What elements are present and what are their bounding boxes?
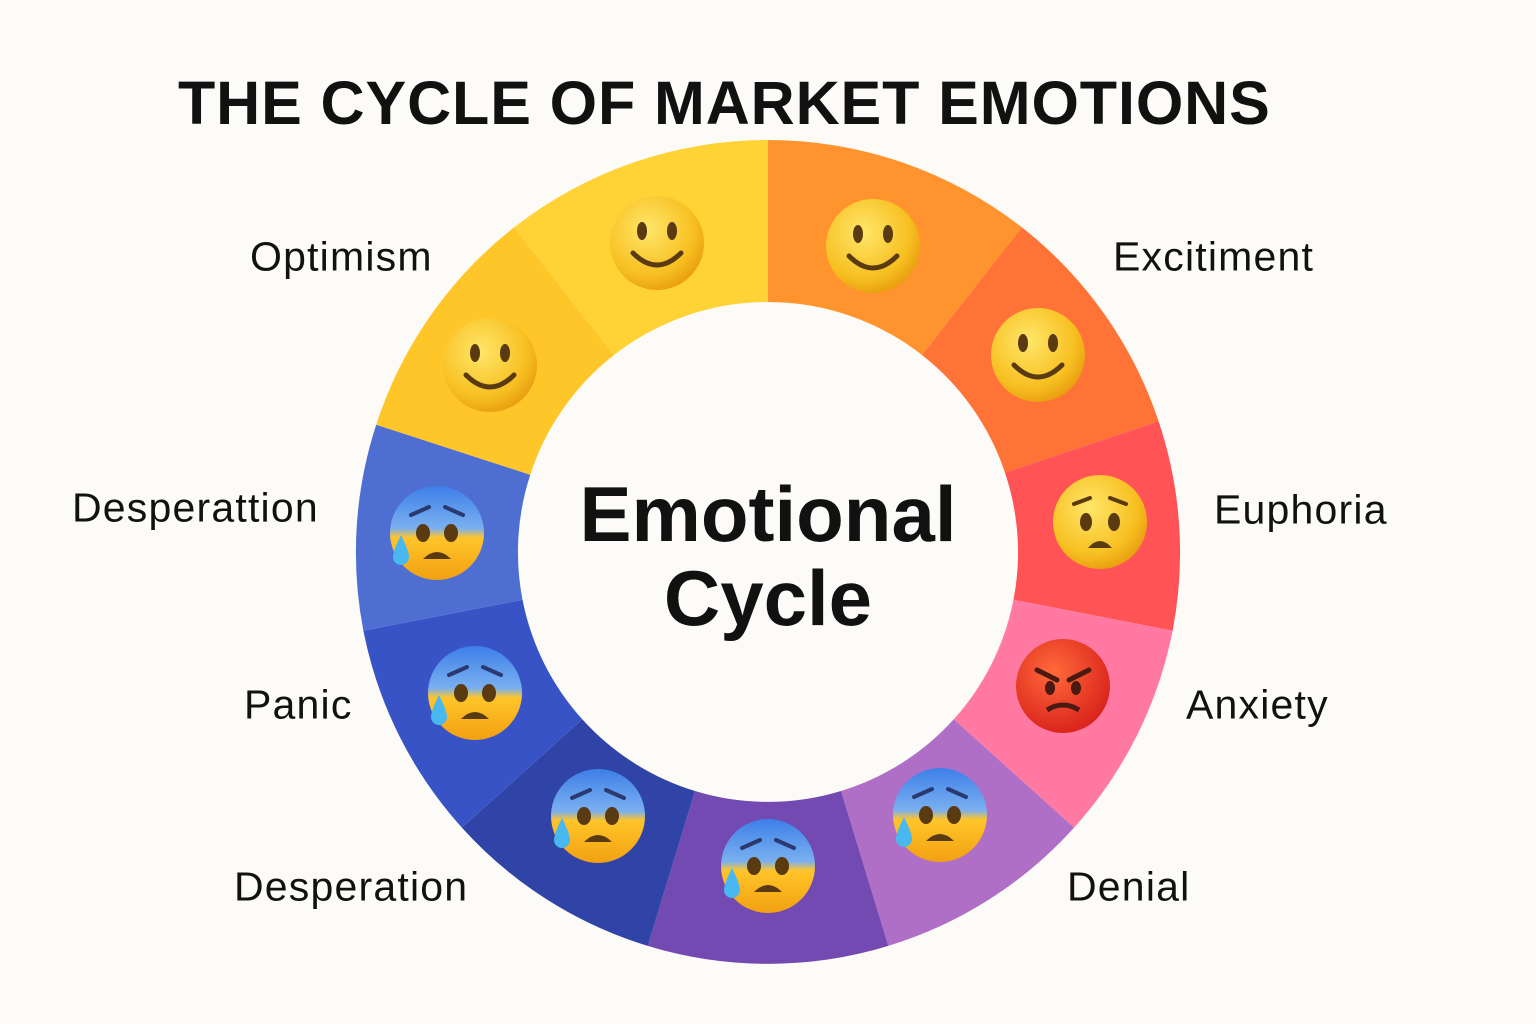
text: Euphoria (1214, 486, 1388, 532)
title: THE CYCLE OF MARKET EMOTIONS (178, 69, 1271, 137)
center text: Cycle (664, 554, 872, 642)
text: Desperattion (72, 484, 319, 530)
text: Denial (1067, 864, 1190, 910)
emojis (390, 196, 1147, 913)
text: Anxiety (1186, 682, 1329, 728)
center text (579, 470, 956, 642)
text: Excitiment (1113, 234, 1314, 280)
center text: Emotional (579, 470, 956, 558)
labels: Optimism (250, 234, 433, 280)
text: Desperation (234, 864, 468, 910)
text: Panic (244, 682, 353, 728)
